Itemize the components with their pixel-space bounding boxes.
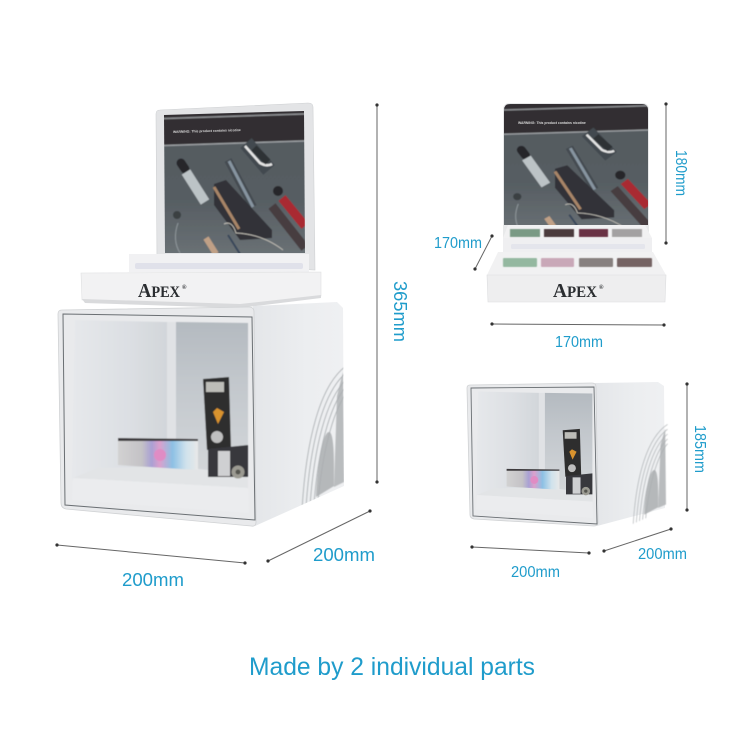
registered mark: ® bbox=[182, 284, 187, 291]
dimension: small cube width 200mm bbox=[472, 547, 589, 581]
dimension: board height 180mm bbox=[666, 104, 689, 243]
dimension: big width 200mm bbox=[57, 545, 245, 590]
board artwork bbox=[164, 111, 305, 253]
small cube side face bbox=[595, 382, 665, 526]
dimension: board depth 170mm bbox=[434, 235, 492, 269]
small APEX logo: APEX bbox=[553, 280, 598, 302]
dimension: small cube depth 200mm: 200mm bbox=[638, 546, 687, 563]
dimension: small cube width 200mm: 200mm bbox=[511, 564, 560, 581]
cube side arc decoration bbox=[302, 366, 346, 510]
big cube cabinet bbox=[58, 302, 346, 526]
board warning text: WARNING: This product contains nicotine bbox=[173, 128, 241, 134]
dimension: board depth 170mm: 170mm bbox=[434, 235, 482, 252]
dimension: board width 170mm: 170mm bbox=[555, 334, 603, 351]
cube interior bbox=[72, 320, 249, 513]
big upper tray bbox=[129, 254, 309, 272]
infographic canvas bbox=[55, 102, 706, 680]
small device with knob bbox=[208, 445, 248, 478]
footer caption: Made by 2 individual parts bbox=[249, 653, 535, 681]
big base plate with logo bbox=[81, 272, 321, 308]
big product: assembled display on cube bbox=[58, 103, 346, 526]
dimension: big width 200mm: 200mm bbox=[122, 570, 184, 590]
small sign board bbox=[503, 103, 649, 238]
dimension: big depth 200mm bbox=[268, 511, 375, 565]
dimension: big height 365mm: 365mm bbox=[390, 281, 410, 342]
small cube arc decoration bbox=[633, 424, 668, 524]
colourful box bbox=[118, 438, 198, 470]
black tall box bbox=[203, 377, 231, 450]
small upper tray bbox=[503, 225, 652, 253]
cube front frame bbox=[58, 307, 256, 526]
small cube front frame bbox=[467, 383, 598, 526]
dimension: small cube height 185mm: 185mm bbox=[691, 425, 708, 473]
lower product slots bbox=[503, 258, 652, 267]
small product: sign board display bbox=[487, 100, 666, 302]
upper product slots bbox=[510, 229, 642, 237]
dimension: board height 180mm: 180mm bbox=[672, 150, 689, 196]
dimension: small cube height 185mm bbox=[687, 384, 708, 510]
cube side face bbox=[253, 302, 344, 526]
big sign board bbox=[156, 103, 315, 270]
small cube interior bbox=[476, 392, 593, 518]
cube glass door outline bbox=[63, 314, 255, 520]
dimension: big depth 200mm: 200mm bbox=[313, 545, 375, 565]
small board warning text: WARNING: This product contains nicotine bbox=[518, 121, 586, 125]
APEX logo: APEX bbox=[138, 280, 181, 302]
small registered mark: ® bbox=[599, 284, 604, 291]
small cube door outline bbox=[471, 387, 597, 524]
dimension: small cube depth 200mm bbox=[604, 529, 687, 563]
small base plate with logo bbox=[487, 252, 666, 302]
small product: cube bbox=[467, 382, 668, 526]
